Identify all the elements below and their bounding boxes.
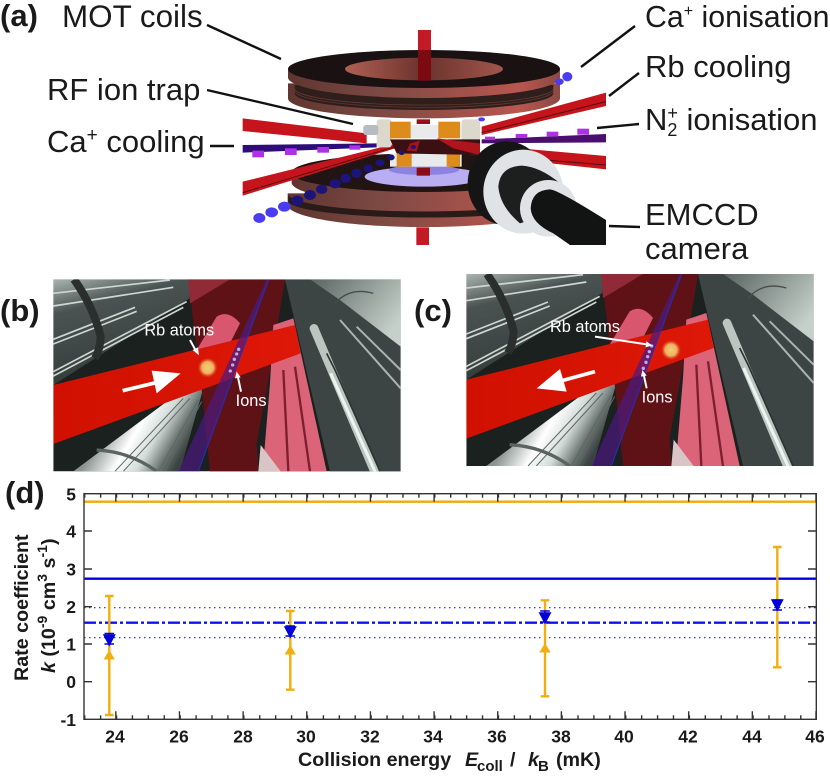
- panel: trap view c: [466, 274, 814, 471]
- x axis title: E: [465, 749, 479, 771]
- x axis tick labels: 46: [805, 726, 825, 746]
- x axis title: k: [528, 749, 540, 771]
- y axis tick labels: 0: [66, 672, 76, 692]
- y axis tick labels: 1: [66, 634, 76, 654]
- label: Ca+ ionisation: Ca: [645, 1, 684, 34]
- arrow to Rb atoms: [190, 340, 199, 355]
- lower MOT coil: [288, 153, 560, 227]
- upper MOT coil: [288, 50, 560, 118]
- leader: Ca+ cooling: [210, 145, 234, 147]
- leader: MOT coils: [207, 25, 281, 59]
- arrow to Rb atoms: [595, 337, 652, 347]
- x axis title: coll: [477, 758, 503, 775]
- reference lines: [84, 502, 816, 638]
- x axis title: (mK): [556, 749, 601, 771]
- label: N2+ ionisation: N: [645, 102, 667, 137]
- x axis tick labels: 40: [614, 726, 634, 746]
- label Rb atoms: Rb atoms: [144, 321, 214, 339]
- blue data points: [104, 600, 783, 645]
- x axis title: B: [538, 758, 549, 775]
- vertical beam through coil: [418, 50, 431, 81]
- x axis title: /: [510, 749, 516, 771]
- y axis tick labels: 4: [66, 522, 76, 542]
- x axis tick labels: [105, 726, 825, 746]
- label Rb atoms: Rb atoms: [550, 318, 620, 336]
- trap scene: [466, 274, 814, 471]
- N2+ ionisation and Ca+ cooling beams: [243, 134, 606, 153]
- leader lines: [207, 25, 640, 227]
- x axis tick labels: 44: [742, 726, 762, 746]
- panel label (c): (c): [414, 293, 452, 328]
- label Ions: Ions: [642, 389, 673, 407]
- motion arrow left: [537, 369, 595, 392]
- magenta pulses: [252, 129, 589, 157]
- arrow to ions: [235, 372, 241, 392]
- vertical beam, bottom: [416, 227, 429, 245]
- trap scene: [53, 279, 401, 477]
- panel label (b): (b): [0, 293, 40, 328]
- panel: trap view b: [53, 279, 401, 477]
- leader: Ca+ ionisation: [581, 26, 635, 67]
- label: N2+ ionisation: +: [667, 103, 678, 123]
- y axis title second line: -9: [34, 615, 50, 628]
- Rb atom cloud: [198, 358, 218, 378]
- x axis tick labels: 30: [296, 726, 316, 746]
- label: Ca+ cooling: cooling: [98, 124, 205, 159]
- y axis tick labels: [60, 484, 76, 730]
- x axis tick labels: 32: [360, 726, 380, 746]
- label: Ca+ ionisation: +: [684, 3, 693, 20]
- y axis title second line: k (10: [38, 628, 60, 673]
- axes frame and ticks: [84, 494, 816, 719]
- leader: Rb cooling: [609, 73, 639, 96]
- y axis title second line: s: [38, 557, 60, 574]
- y axis tick labels: 5: [66, 484, 76, 504]
- x axis title: Collision energy: [298, 749, 451, 771]
- label: Ca+ cooling: +: [87, 125, 98, 146]
- y axis tick labels: -1: [60, 710, 76, 730]
- label: N2+ ionisation: ionisation: [678, 102, 818, 137]
- panel label (d): (d): [5, 475, 45, 510]
- y axis title second line: cm: [38, 582, 60, 616]
- panel: rate coefficient chart: [11, 484, 825, 775]
- label: EMCCD camera: EMCCD: [645, 197, 759, 232]
- label: N2+ ionisation: 2: [667, 120, 677, 140]
- label: RF ion trap: RF ion trap: [47, 72, 200, 107]
- Rb cooling beams: [243, 93, 606, 196]
- orange error bars: [104, 547, 782, 715]
- Rb atom cloud: [661, 340, 681, 360]
- leader: EMCCD camera: [609, 226, 640, 227]
- x axis tick labels: 36: [487, 726, 507, 746]
- leader: N2+ ionisation: [597, 124, 639, 128]
- vertical cooling beam, top: [418, 30, 431, 80]
- y axis tick labels: 2: [66, 597, 76, 617]
- y axis title: Rate coefficient: [11, 534, 33, 681]
- x axis tick labels: 42: [678, 726, 698, 746]
- label: Rb cooling: Rb cooling: [645, 49, 791, 84]
- x axis tick labels: 24: [105, 726, 125, 746]
- label: EMCCD camera: camera: [645, 231, 749, 266]
- leader: RF ion trap: [207, 90, 353, 124]
- y axis title second line: ): [38, 538, 60, 545]
- label: MOT coils: MOT coils: [62, 0, 203, 34]
- EMCCD camera: [468, 141, 606, 245]
- label Ions: Ions: [236, 392, 267, 410]
- y axis tick labels: 3: [66, 560, 76, 580]
- x axis tick labels: 38: [551, 726, 571, 746]
- motion arrow right: [123, 371, 181, 393]
- label: Ca+ cooling: Ca: [47, 124, 87, 159]
- arrow to ions: [641, 370, 647, 388]
- blue ionisation pulses: [253, 72, 572, 223]
- ion trap: [363, 119, 480, 176]
- ion string: [229, 348, 240, 373]
- label: Ca+ ionisation: ionisation: [693, 1, 830, 34]
- y axis title second line: 3: [34, 574, 50, 582]
- x axis tick labels: 26: [169, 726, 189, 746]
- x axis tick labels: 28: [233, 726, 253, 746]
- y axis title second line: -1: [34, 545, 50, 558]
- ion string: [642, 344, 653, 370]
- x axis tick labels: 34: [423, 726, 443, 746]
- panel: apparatus diagram: [243, 30, 606, 245]
